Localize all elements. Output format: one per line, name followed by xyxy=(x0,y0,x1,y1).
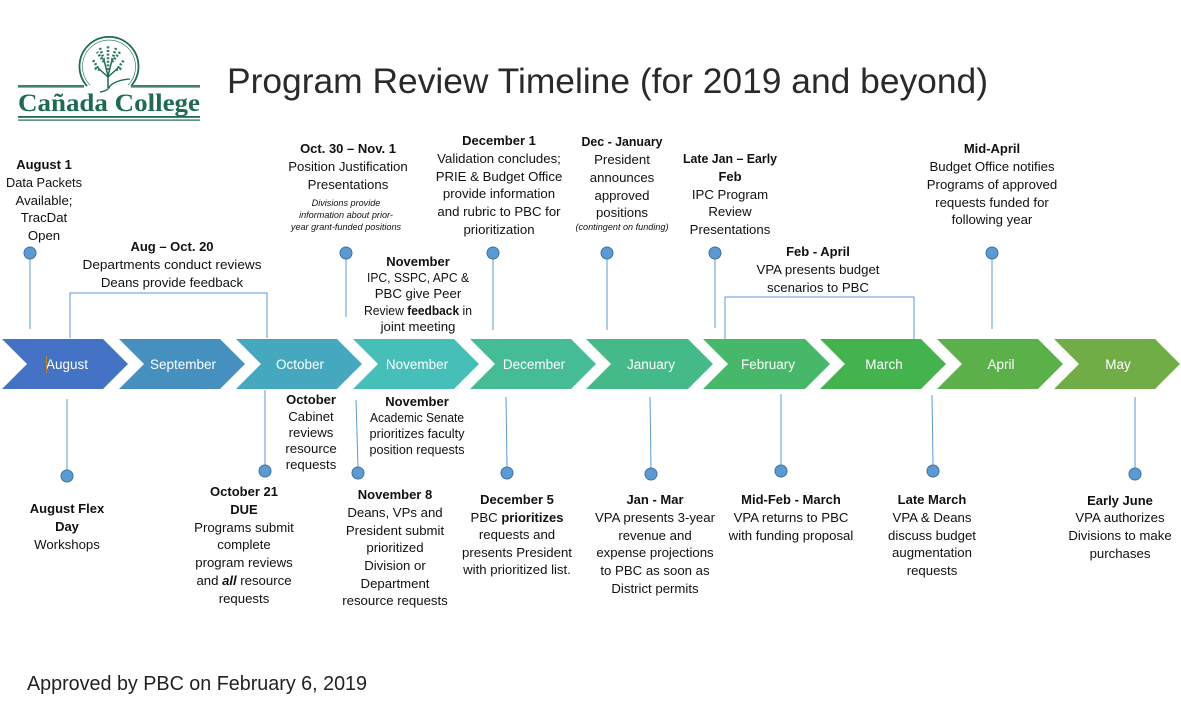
text: Feb to April: VPA presents budget xyxy=(757,262,880,277)
text: Aug to Oct 20: Deans provide feedback xyxy=(101,275,244,290)
text: Jan to Mar: revenue and xyxy=(618,528,692,543)
text: Mid-April: following year xyxy=(952,212,1033,227)
text: Oct 30 to Nov 1: Position Justification xyxy=(288,159,408,174)
chevron: April: April xyxy=(987,357,1015,372)
text: November 8: President submit xyxy=(346,523,444,538)
text: October 21 due: complete xyxy=(217,537,271,552)
chevron: September: September xyxy=(150,357,217,372)
text: Mid-April: Budget Office notifies xyxy=(929,159,1055,174)
text: November Academic Senate xyxy=(370,394,465,457)
text: December 1: and rubric to PBC for xyxy=(437,204,561,219)
text: Late Jan to Early Feb: Presentations xyxy=(690,222,771,237)
chevron: November xyxy=(353,339,479,389)
text: October Cabinet xyxy=(285,392,337,472)
chevron: April xyxy=(937,339,1063,389)
text: Jan to Mar: expense projections xyxy=(596,545,714,560)
text: Early June: VPA authorizes xyxy=(1075,510,1165,525)
text: November Academic Senate: November xyxy=(385,394,449,409)
text: November 8: Deans, VPs and xyxy=(347,505,443,520)
title: Program Review Timeline (for 2019 and beyond) xyxy=(227,62,988,101)
text: Mid-Feb to March: Mid-Feb - March xyxy=(741,492,841,507)
text: November 8: Department xyxy=(361,576,430,591)
footer note: Approved by PBC on February 6, 2019 xyxy=(27,673,367,695)
text: August 1: Data Packets xyxy=(6,175,82,190)
chevron: January: January xyxy=(627,357,675,372)
text: Jan to Mar xyxy=(595,492,716,596)
text: Mid-Feb to March: with funding proposal xyxy=(728,528,853,543)
text: December 5: December 5 xyxy=(480,492,554,507)
text: December 5: presents President xyxy=(462,545,572,560)
text: Feb to April xyxy=(757,244,880,295)
text: November peer review: November xyxy=(386,254,450,269)
text: Late March: VPA & Deans xyxy=(893,510,972,525)
text: Dec to January: positions xyxy=(596,205,648,220)
text: December 1: Validation concludes; xyxy=(437,151,561,166)
chevron: March: March xyxy=(865,357,903,372)
text: August 1 xyxy=(6,157,82,243)
text: October Cabinet: reviews xyxy=(289,425,334,440)
text: Jan to Mar: VPA presents 3-year xyxy=(595,510,716,525)
text: November peer review xyxy=(364,254,472,334)
text: Oct 30 to Nov 1: Divisions provide xyxy=(312,198,380,208)
text: December 5 xyxy=(462,492,572,577)
chevron: November: November xyxy=(386,357,449,372)
text: November Academic Senate: prioritizes faculty xyxy=(370,426,465,441)
timeline pins xyxy=(24,247,1141,482)
text: December 5: requests and xyxy=(479,527,555,542)
text: Oct 30 to Nov 1: information about prior- xyxy=(299,210,393,220)
text: Early June: Early June xyxy=(1087,493,1153,508)
text: Late Jan to Early Feb xyxy=(683,151,778,237)
text: Mid-April xyxy=(927,141,1057,227)
chevron: August: August xyxy=(46,357,88,372)
chevron: May: May xyxy=(1105,357,1131,372)
text: October 21 due: requests xyxy=(219,591,270,606)
connector lines and brackets xyxy=(30,259,1135,470)
chevron: January xyxy=(586,339,713,389)
text: October Cabinet: October xyxy=(286,392,336,407)
chevron: December: December xyxy=(503,357,566,372)
text: October Cabinet: resource xyxy=(285,441,337,456)
chevron: February xyxy=(703,339,830,389)
text: August Flex Day: Day xyxy=(55,519,80,534)
text: Jan to Mar: Jan - Mar xyxy=(626,492,684,507)
chevron: March xyxy=(820,339,946,389)
text: Aug to Oct 20 xyxy=(82,239,262,290)
chevron: February: February xyxy=(741,357,795,372)
text: December 1: PRIE & Budget Office xyxy=(436,169,562,184)
logo: Cañada College xyxy=(18,37,200,121)
text: Mid-April: Programs of approved xyxy=(927,177,1057,192)
logo: Cañada College: Cañada College xyxy=(18,90,200,117)
text: October 21 due: and all resource xyxy=(196,573,292,588)
text: Aug to Oct 20: Aug – Oct. 20 xyxy=(130,239,214,254)
text: December 5: PBC prioritizes xyxy=(471,510,563,525)
text: November 8: resource requests xyxy=(342,593,448,608)
text: Mid-Feb to March xyxy=(728,492,853,543)
text: November peer review: IPC, SSPC, APC & xyxy=(367,270,469,285)
text: Oct 30 to Nov 1: Oct. 30 – Nov. 1 xyxy=(300,141,396,156)
text: Jan to Mar: to PBC as soon as xyxy=(600,563,710,578)
text: November 8: November 8 xyxy=(358,487,432,502)
text: November peer review: Review feedback in xyxy=(364,303,472,318)
text: August 1: Available; xyxy=(16,193,72,208)
text: August 1: Open xyxy=(28,228,60,243)
text: Mid-April: Mid-April xyxy=(964,141,1020,156)
chevron: December xyxy=(470,339,596,389)
text: Oct 30 to Nov 1: year grant-funded positions xyxy=(290,222,402,232)
chevron: October xyxy=(236,339,362,389)
text: Feb to April: scenarios to PBC xyxy=(767,280,869,295)
text: Aug to Oct 20: Departments conduct reviews xyxy=(82,257,262,272)
text: Dec to January: announces xyxy=(590,170,655,185)
text: August 1: TracDat xyxy=(21,210,68,225)
text: Feb to April: Feb - April xyxy=(786,244,850,259)
text: Dec to January: Dec - January xyxy=(582,134,663,149)
text: Late March: Late March xyxy=(898,492,966,507)
text: Early June: purchases xyxy=(1090,546,1151,561)
chevron: October: October xyxy=(276,357,325,372)
text: October 21 due: program reviews xyxy=(195,555,293,570)
text: Late March xyxy=(888,492,976,578)
text: November Academic Senate: position requests xyxy=(370,442,465,457)
text: Late March: discuss budget xyxy=(888,528,976,543)
text: November peer review: PBC give Peer xyxy=(375,286,462,301)
text: November 8: Division or xyxy=(364,558,426,573)
text: Early June xyxy=(1068,493,1172,561)
text: Early June: Divisions to make xyxy=(1068,528,1172,543)
text: November 8: prioritized xyxy=(366,540,424,555)
text: October 21 due xyxy=(194,484,294,606)
text: Late Jan to Early Feb: IPC Program xyxy=(692,187,768,202)
text: December 1: prioritization xyxy=(463,222,535,237)
text: Late March: requests xyxy=(907,563,958,578)
text: Mid-April: requests funded for xyxy=(935,195,1049,210)
text: October 21 due: DUE xyxy=(230,502,258,517)
chevron: May xyxy=(1054,339,1180,389)
chevron: August xyxy=(2,339,128,389)
text: October Cabinet: requests xyxy=(286,457,337,472)
text: Jan to Mar: District permits xyxy=(611,581,699,596)
text: August 1: August 1 xyxy=(16,157,72,172)
text: December 5: with prioritized list. xyxy=(462,562,571,577)
text: October 21 due: October 21 xyxy=(210,484,278,499)
text: Oct 30 to Nov 1: Presentations xyxy=(308,177,389,192)
text: Oct 30 to Nov 1 xyxy=(288,141,408,232)
text: Late Jan to Early Feb: Late Jan – Early xyxy=(683,151,778,166)
text: November peer review: joint meeting xyxy=(380,319,455,334)
text: Late March: augmentation xyxy=(892,545,972,560)
text: Late Jan to Early Feb: Feb xyxy=(718,169,742,184)
text: Mid-Feb to March: VPA returns to PBC xyxy=(734,510,849,525)
text: December 1: provide information xyxy=(443,186,555,201)
text: August Flex Day: August Flex xyxy=(30,501,105,516)
text: Late Jan to Early Feb: Review xyxy=(708,204,752,219)
text: Dec to January xyxy=(575,134,669,232)
text: December 1 xyxy=(436,133,562,237)
text: October 21 due: Programs submit xyxy=(194,520,294,535)
chevron: September xyxy=(119,339,245,389)
text: August Flex Day: Workshops xyxy=(34,537,100,552)
month chevrons xyxy=(2,339,1180,389)
text: November 8 xyxy=(342,487,448,608)
text: December 1: December 1 xyxy=(462,133,536,148)
text: Dec to January: President xyxy=(594,152,650,167)
text: August Flex Day xyxy=(30,501,105,552)
text: Dec to January: (contingent on funding) xyxy=(575,222,669,232)
text: Dec to January: approved xyxy=(594,188,650,203)
text: October Cabinet: Cabinet xyxy=(288,409,334,424)
text: November Academic Senate: Academic Senate xyxy=(370,410,464,425)
